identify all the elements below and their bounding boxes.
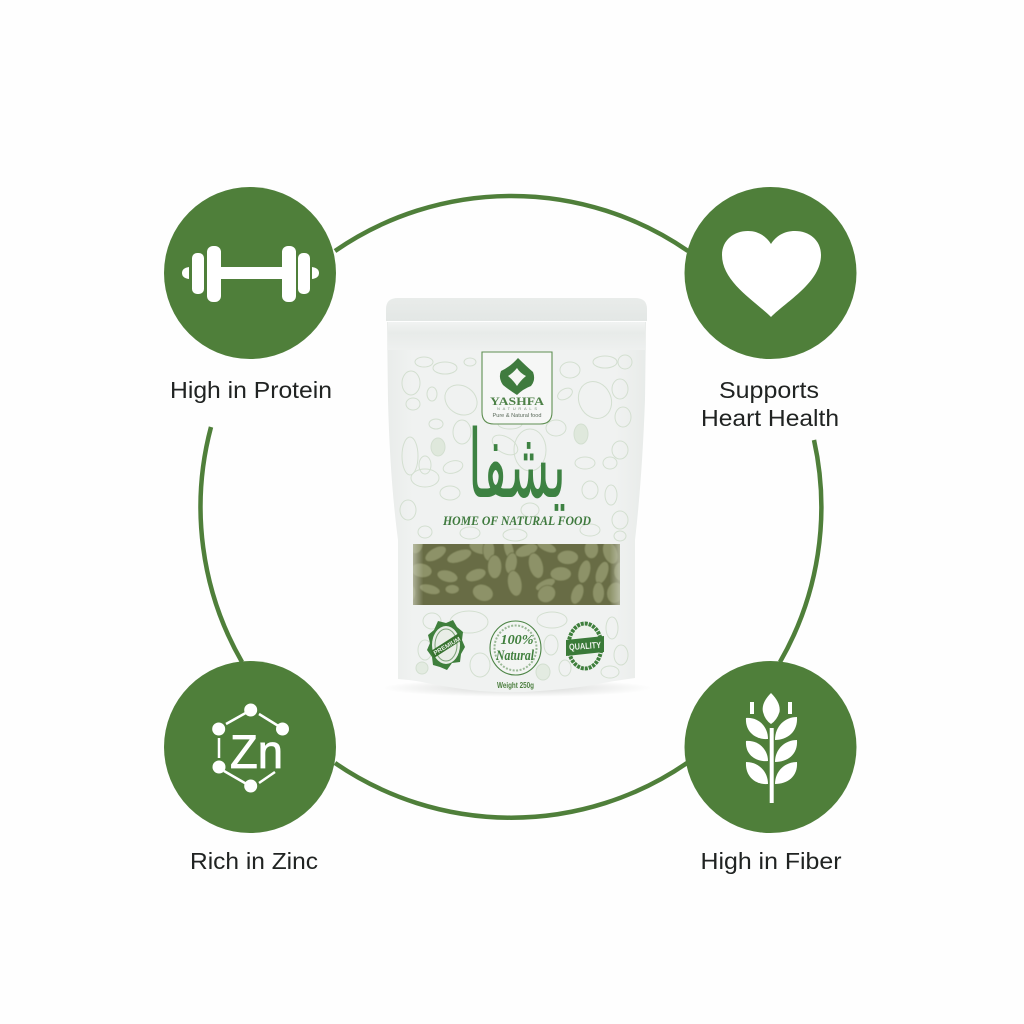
nut doodle pattern <box>400 355 632 680</box>
label: High in Fiber <box>700 848 842 874</box>
window with seeds <box>413 544 620 605</box>
top seal <box>386 298 647 321</box>
arabic brand name: يشفا <box>468 411 566 520</box>
badge: certified seal: PREMIUM <box>433 637 462 657</box>
icon: zinc molecule <box>212 704 289 792</box>
badge: quality <box>566 624 604 668</box>
badge: quality: QUALITY <box>569 640 601 652</box>
label <box>701 377 839 431</box>
brand logo: NATURALS <box>497 406 537 411</box>
icon: wheat <box>746 693 797 803</box>
benefit: high in protein <box>164 187 336 403</box>
label: Rich in Zinc <box>190 848 318 874</box>
brand logo: YASHFA <box>490 394 544 408</box>
benefit: supports heart health <box>684 187 856 431</box>
connecting ring <box>201 196 821 818</box>
icon: heart <box>722 231 821 317</box>
brand logo: Pure & Natural food <box>492 413 542 419</box>
badge: certified seal <box>427 620 465 670</box>
badge: 100% natural: Natural <box>495 648 535 664</box>
label: Heart Health <box>701 405 839 431</box>
badge: 100% natural <box>490 621 541 675</box>
label: High in Protein <box>170 377 332 403</box>
label: Supports <box>719 377 819 403</box>
badge: 100% natural: 100% <box>500 633 534 648</box>
tagline: HOME OF NATURAL FOOD <box>442 514 591 528</box>
icon: dumbbell <box>182 246 319 302</box>
icon: zinc molecule: Zn <box>230 725 283 778</box>
product pouch <box>382 298 652 697</box>
benefit: high in fiber <box>684 661 856 874</box>
benefit: rich in zinc <box>164 661 336 874</box>
net weight: Weight 250g <box>497 681 534 690</box>
brand logo <box>482 352 552 424</box>
